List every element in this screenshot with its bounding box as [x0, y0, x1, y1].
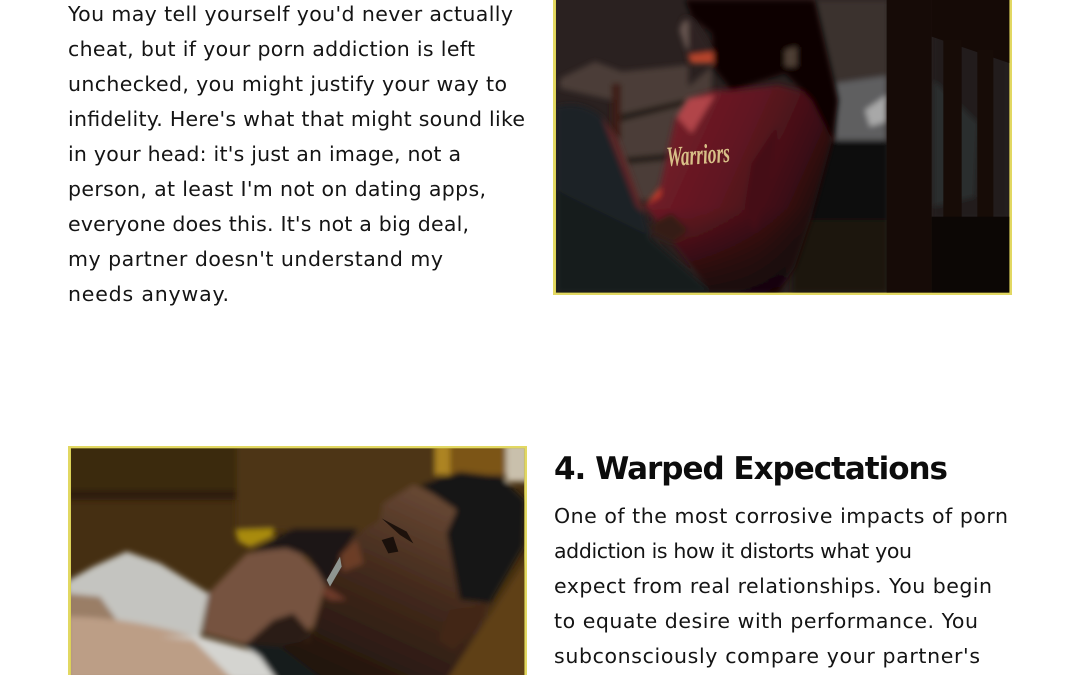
text block: infidelity paragraph: infidelity. Here's what that might sound like — [68, 107, 525, 131]
text block: infidelity paragraph: unchecked, you might justify your way to — [68, 72, 507, 96]
text block: warped expectations paragraph: addiction is how it distorts what you — [554, 539, 912, 563]
text block: infidelity paragraph: needs anyway. — [68, 282, 229, 306]
text block: infidelity paragraph: everyone does this. It's not a big deal, — [68, 212, 469, 236]
text block: infidelity paragraph: person, at least I'm not on dating apps, — [68, 177, 486, 201]
photo: woman in red hoodie sitting in a dark room: Warriors — [666, 138, 731, 173]
text block: warped expectations paragraph: subconsciously compare your partner's — [554, 644, 980, 668]
text block: warped expectations paragraph: One of the most corrosive impacts of porn — [554, 504, 1008, 528]
text block: warped expectations paragraph: expect from real relationships. You begin — [554, 574, 992, 598]
text block: infidelity paragraph: You may tell yourself you'd never actually — [67, 2, 513, 26]
photo: woman in red hoodie sitting in a dark room — [554, 0, 1011, 294]
photo: couple lying in bed — [67, 443, 530, 675]
text block: warped expectations paragraph: to equate desire with performance. You — [554, 609, 978, 633]
text block: infidelity paragraph: my partner doesn't understand my — [68, 247, 443, 271]
text block: infidelity paragraph: in your head: it's just an image, not a — [68, 142, 461, 166]
text block: warped expectations paragraph — [554, 504, 1008, 668]
heading: 4. Warped Expectations: 4. Warped Expectations — [554, 451, 948, 487]
text block: infidelity paragraph: cheat, but if your porn addiction is left — [68, 37, 475, 61]
text block: infidelity paragraph — [67, 2, 525, 306]
